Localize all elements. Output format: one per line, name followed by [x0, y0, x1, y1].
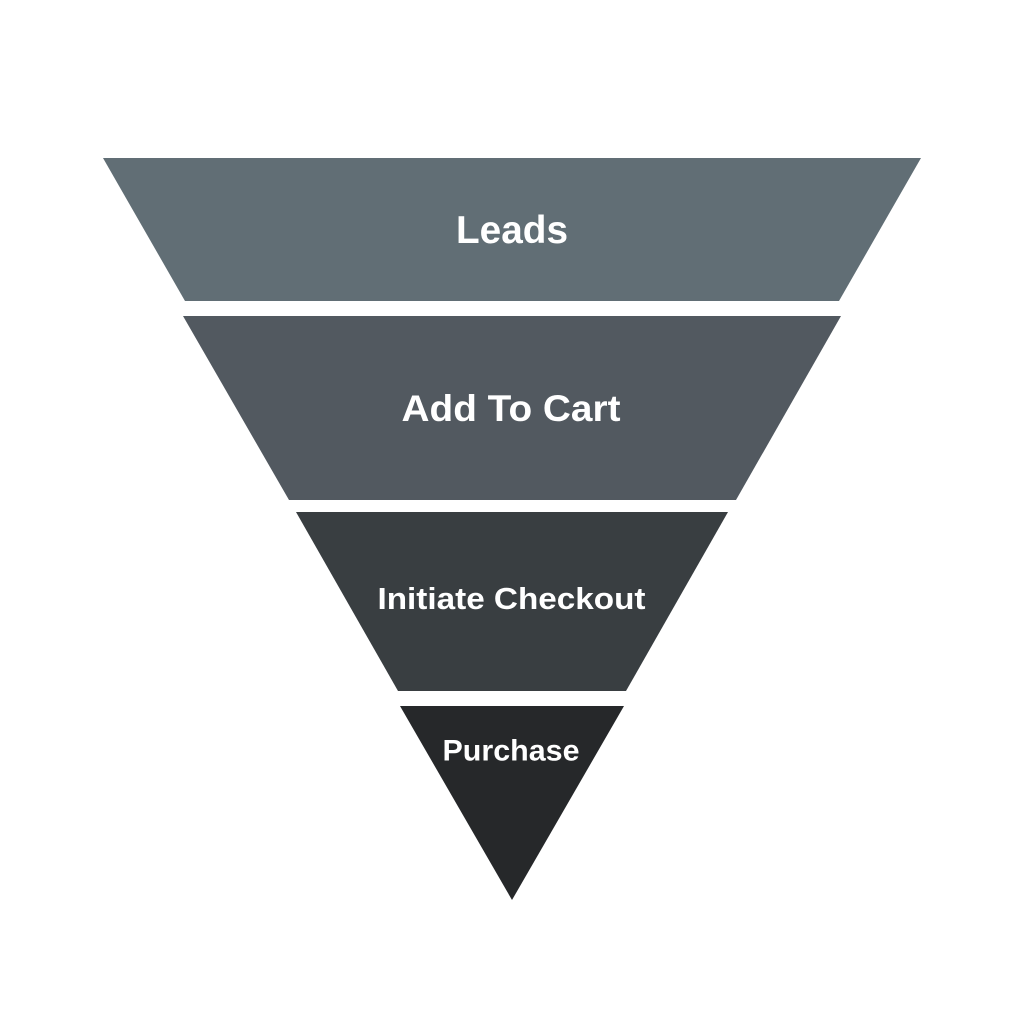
funnel tier: Leads: Leads	[456, 209, 568, 252]
funnel tier: Initiate Checkout	[296, 512, 728, 691]
funnel tier: Purchase: Purchase	[442, 734, 580, 768]
funnel tier: Add To Cart	[183, 316, 841, 500]
funnel tier: Initiate Checkout: Initiate Checkout	[378, 581, 646, 616]
funnel tier: Add To Cart: Add To Cart	[402, 388, 620, 429]
funnel tier: Purchase	[400, 706, 624, 900]
funnel tier: Leads	[103, 158, 921, 301]
